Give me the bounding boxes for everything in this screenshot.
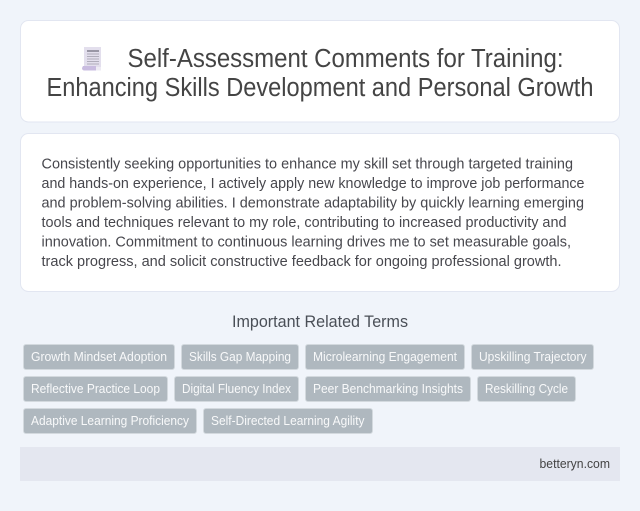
tag: Microlearning Engagement: Microlearning Engagement <box>313 350 457 364</box>
paragraph text <box>42 156 584 270</box>
tag: Reskilling Cycle: Reskilling Cycle <box>485 382 568 396</box>
title line 1: Self-Assessment Comments for Training: <box>128 45 564 73</box>
tag: Upskilling Trajectory <box>472 344 594 370</box>
tag: Skills Gap Mapping: Skills Gap Mapping <box>189 350 291 364</box>
tag: Growth Mindset Adoption <box>24 344 174 370</box>
paragraph text: track progress, and solicit constructive feedback for ongoing professional growth. <box>42 254 562 270</box>
tag: Digital Fluency Index <box>174 376 298 402</box>
tag: Skills Gap Mapping <box>182 344 298 370</box>
paragraph text: tools and techniques relevant to my role, contributing to increased productivity and <box>42 215 566 231</box>
tag: Reflective Practice Loop: Reflective Practice Loop <box>31 382 160 396</box>
tag: Upskilling Trajectory: Upskilling Trajectory <box>479 350 587 364</box>
panel: title header <box>20 20 620 122</box>
tag: Reflective Practice Loop <box>24 376 168 402</box>
tag: Peer Benchmarking Insights: Peer Benchmarking Insights <box>313 382 463 396</box>
tag: Peer Benchmarking Insights <box>306 376 470 402</box>
tag: Adaptive Learning Proficiency: Adaptive Learning Proficiency <box>31 414 190 428</box>
tag: Self-Directed Learning Agility <box>204 408 372 434</box>
panel: related term tags <box>24 344 594 434</box>
paragraph text: and hands-on experience, I actively apply new knowledge to improve job performance <box>42 176 584 192</box>
panel: self-assessment paragraph <box>20 134 620 292</box>
tag: Self-Directed Learning Agility: Self-Directed Learning Agility <box>211 414 365 428</box>
paragraph text: Consistently seeking opportunities to enhance my skill set through targeted training <box>42 156 573 172</box>
tag: Microlearning Engagement <box>306 344 464 370</box>
heading: important related terms: Important Related Terms <box>232 313 408 331</box>
footer bar <box>20 447 620 481</box>
tag: Growth Mindset Adoption: Growth Mindset Adoption <box>31 350 167 364</box>
paragraph text: and problem-solving abilities. I demonstrate adaptability by quickly learning emerging <box>42 195 584 211</box>
tag: Digital Fluency Index: Digital Fluency Index <box>182 382 292 396</box>
title line 2: Enhancing Skills Development and Personal Growth <box>46 74 594 102</box>
paragraph text: innovation. Commitment to continuous learning drives me to set measurable goals, <box>42 235 571 251</box>
tag: Reskilling Cycle <box>478 376 576 402</box>
tag: Adaptive Learning Proficiency <box>24 408 196 434</box>
footer source: betteryn.com <box>540 457 610 471</box>
icon: document scroll <box>82 47 101 70</box>
